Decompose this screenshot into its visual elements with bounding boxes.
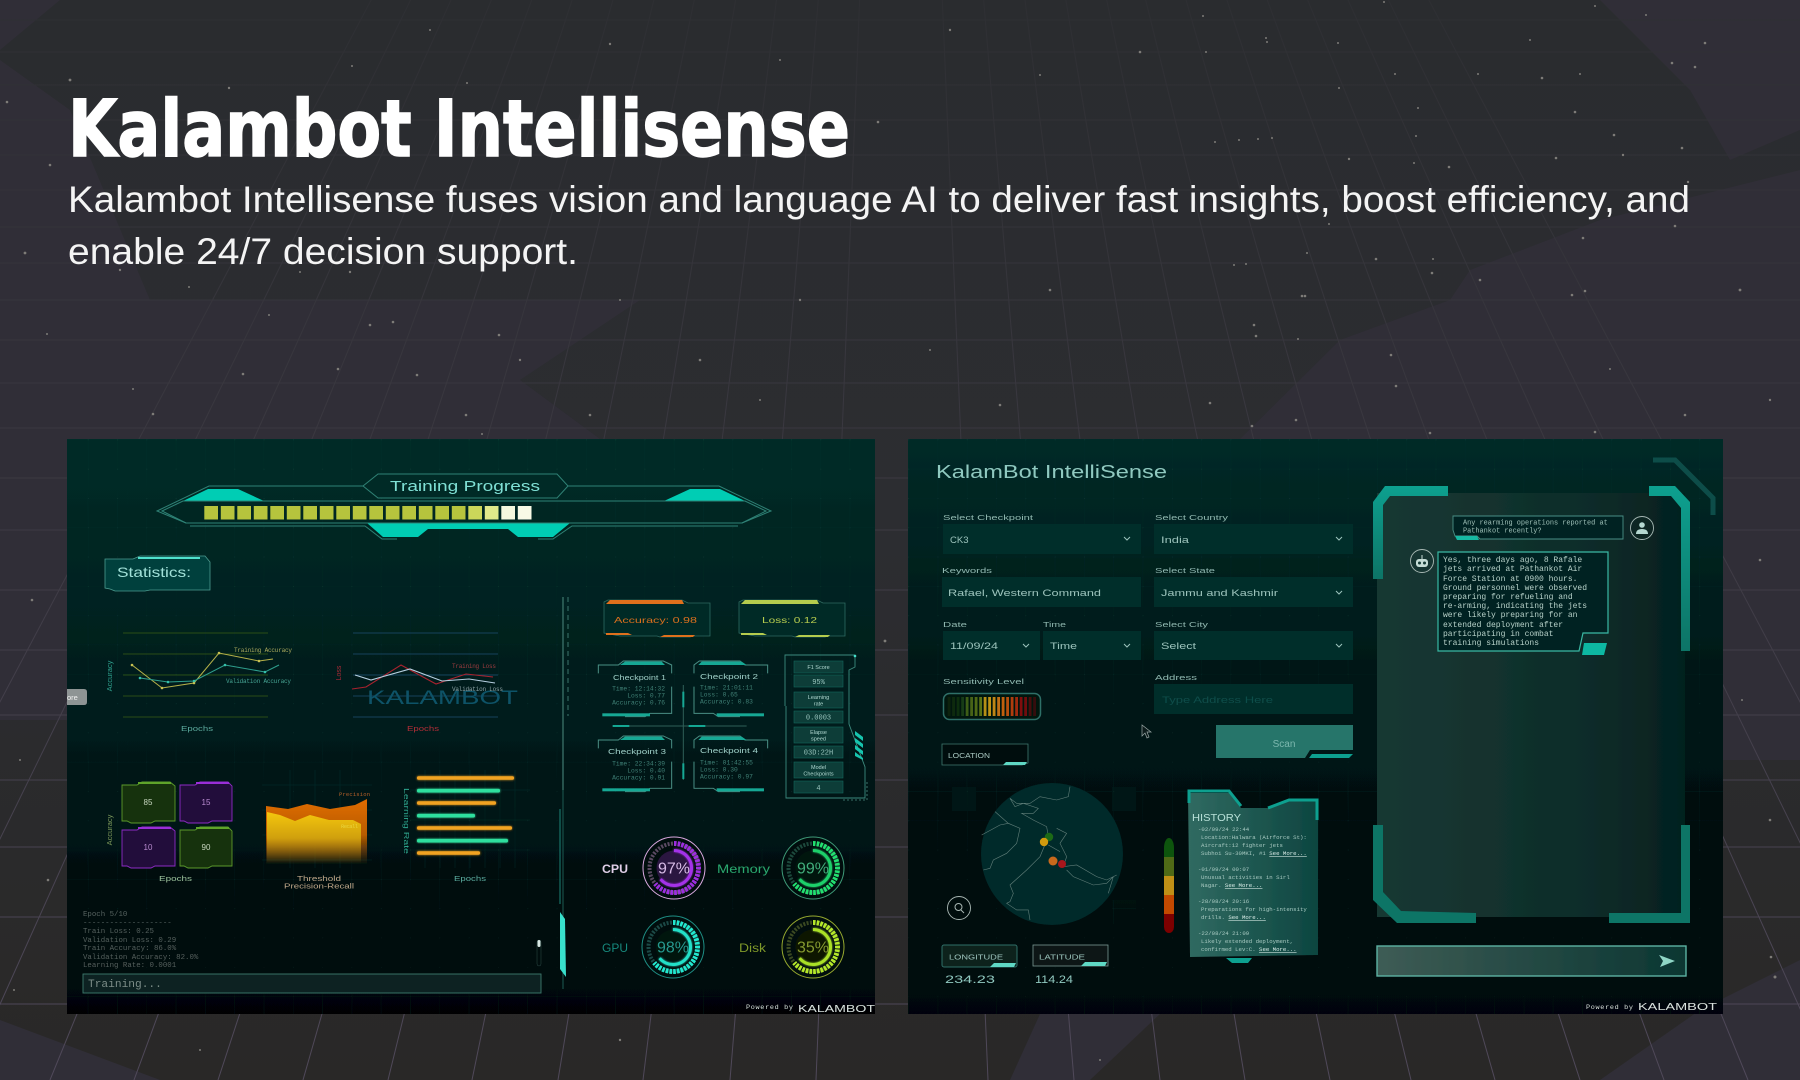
loss metric card xyxy=(739,600,845,637)
gauge: CPU xyxy=(602,837,705,899)
form fields xyxy=(942,513,1353,714)
training status bar: Training... xyxy=(88,979,162,991)
line chart: accuracy: Accuracy xyxy=(105,660,114,691)
metrics side panel: Learning xyxy=(808,695,829,701)
line chart: loss with watermark: Loss xyxy=(336,665,343,680)
terminal log xyxy=(83,911,199,970)
checkpoint cards: Checkpoint 3 xyxy=(608,747,666,756)
area chart: precision recall: Threshold xyxy=(297,876,341,883)
history panel: Subhoi Su-30MKI, #1 See More... xyxy=(1201,850,1307,857)
more tab xyxy=(67,689,87,705)
icon: user xyxy=(1630,516,1654,540)
checkpoint cards: Checkpoint 4 xyxy=(700,746,758,755)
checkpoint cards: Time: 01:42:55 xyxy=(700,760,753,766)
terminal log: Learning Rate: 0.0001 xyxy=(83,962,177,970)
line chart: loss with watermark: KALAMBOT xyxy=(367,688,519,709)
longitude latitude readouts xyxy=(942,945,1108,986)
line chart: loss with watermark xyxy=(336,633,519,733)
powered by logo: Powered by xyxy=(746,1004,793,1012)
history panel: Location:Halwara (Airforce St): xyxy=(1201,834,1307,841)
powered by logo: KALAMBOT xyxy=(798,1003,876,1015)
checkpoint cards: Time: 21:01:11 xyxy=(700,684,753,692)
bot chat response: preparing for refueling and xyxy=(1443,593,1573,602)
history panel: drills. See More... xyxy=(1201,914,1266,921)
terminal log: Train Loss: 0.25 xyxy=(83,928,154,936)
checkpoint cards: Loss: 0.65 xyxy=(700,692,738,698)
history panel: confirmed Lev:C. See More... xyxy=(1201,946,1297,953)
training status bar xyxy=(83,940,541,993)
line chart: accuracy: Training Accuracy xyxy=(234,647,292,654)
gauge: GPU: 98% xyxy=(657,940,689,956)
powered by logo: KALAMBOT xyxy=(1638,1001,1718,1013)
form fields: India xyxy=(1161,535,1190,546)
gauge: memory xyxy=(717,837,844,899)
area chart: precision recall: Precision-Recall xyxy=(284,884,355,890)
user chat message: Pathankot recently? xyxy=(1463,528,1542,536)
form fields: 11/09/24 xyxy=(950,641,998,652)
area chart: precision recall: Precision xyxy=(339,791,370,798)
subtitle: Kalambot Intellisense fuses vision and language AI to deliver fast insights, boost efficiency, and xyxy=(68,179,1690,220)
bot chat response xyxy=(1438,552,1608,655)
icon: robot xyxy=(1410,550,1434,572)
gauge: disk: 35% xyxy=(797,940,829,956)
bot chat response: Yes, three days ago, 8 Rafale xyxy=(1443,556,1582,565)
chat window frame xyxy=(1373,460,1713,923)
line chart: accuracy xyxy=(105,633,292,733)
checkpoint cards: Loss: 0.40 xyxy=(627,768,665,774)
checkpoint cards: Loss: 0.30 xyxy=(700,766,738,774)
confusion matrix: 90 xyxy=(202,843,211,852)
metrics side panel: Model xyxy=(811,765,826,771)
longitude latitude readouts: LONGITUDE xyxy=(949,952,1003,962)
metrics side panel: F1 Score xyxy=(807,665,830,671)
form fields: Select City xyxy=(1155,620,1208,629)
history panel xyxy=(1188,791,1318,963)
history panel: Likely extended deployment, xyxy=(1201,938,1293,945)
form fields: CK3 xyxy=(950,535,968,546)
form fields: Select Checkpoint xyxy=(943,513,1034,522)
form fields: Time xyxy=(1043,620,1066,629)
panel: training dashboard screenshot xyxy=(67,439,876,1015)
gauge: CPU: 97% xyxy=(658,860,690,878)
form fields: Jammu and Kashmir xyxy=(1161,588,1278,599)
terminal log: Train Accuracy: 86.0% xyxy=(83,945,177,953)
bar chart: learning rate: Epochs xyxy=(454,876,487,883)
gauge: disk xyxy=(739,916,844,978)
vertical divider xyxy=(560,597,568,989)
gauge: CPU: CPU xyxy=(602,864,628,876)
app title: KalamBot IntelliSense xyxy=(936,462,1167,482)
history panel: Aircraft:12 fighter jets xyxy=(1201,842,1283,849)
metrics side panel: 0.0003 xyxy=(806,714,831,722)
powered by logo xyxy=(1586,1001,1718,1013)
confusion matrix: Accuracy xyxy=(105,814,114,845)
icon: search xyxy=(948,896,970,920)
scan button: Scan xyxy=(1273,739,1295,750)
line chart: accuracy: Epochs xyxy=(181,726,214,733)
history panel: HISTORY xyxy=(1192,812,1241,824)
terminal log: Validation Accuracy: 82.0% xyxy=(83,954,199,962)
scan button xyxy=(1216,725,1353,758)
gauge: GPU: GPU xyxy=(602,943,628,955)
title: Kalambot Intellisense xyxy=(68,85,850,175)
loss metric card: Loss: 0.12 xyxy=(762,615,817,625)
form fields: Keywords xyxy=(942,566,992,575)
history panel: Nagar. See More... xyxy=(1201,882,1262,889)
terminal log: Validation Loss: 0.29 xyxy=(83,937,176,945)
history panel: -22/08/24 21:09 xyxy=(1198,930,1250,937)
line chart: loss with watermark: Training Loss xyxy=(452,663,496,670)
gauge: memory: Memory xyxy=(717,864,770,876)
checkpoint cards: Accuracy: 0.97 xyxy=(700,774,753,780)
terminal log: Epoch 5/10 xyxy=(83,911,127,919)
bot chat response: re-arming, indicating the jets xyxy=(1443,602,1587,611)
user chat message: Any rearming operations reported at xyxy=(1463,520,1608,528)
statistics label xyxy=(105,556,210,591)
checkpoint cards: Accuracy: 0.76 xyxy=(612,700,665,706)
panel: intellisense query screenshot xyxy=(908,439,1723,1014)
confusion matrix: Epochs xyxy=(159,876,193,883)
history panel: -02/09/24 22:44 xyxy=(1198,826,1250,833)
bot chat response: participating in combat xyxy=(1443,630,1553,639)
checkpoint cards: Loss: 0.77 xyxy=(627,692,665,700)
sensitivity meter xyxy=(944,694,1040,720)
location label xyxy=(942,744,1028,765)
metrics side panel: Checkpoints xyxy=(803,772,834,778)
form fields: Sensitivity Level xyxy=(943,677,1024,686)
bot chat response: Ground personnel were observed xyxy=(1443,584,1587,593)
checkpoint cards: Accuracy: 0.83 xyxy=(700,698,753,706)
powered by logo: Powered by xyxy=(1586,1004,1633,1012)
form fields: Select Country xyxy=(1155,513,1228,522)
subtitle xyxy=(68,179,1690,272)
metrics side panel: 95% xyxy=(812,679,826,687)
accuracy metric card: Accuracy: 0.98 xyxy=(614,615,697,625)
longitude latitude readouts: 114.24 xyxy=(1035,974,1073,986)
gauge: GPU xyxy=(602,916,704,978)
checkpoint cards xyxy=(598,661,768,792)
history panel: -28/08/24 20:16 xyxy=(1198,898,1250,905)
bot chat response: extended deployment after xyxy=(1443,621,1563,630)
training progress banner: Training Progress xyxy=(390,478,540,495)
form fields: Select xyxy=(1161,641,1196,652)
metrics side panel: 03D:22H xyxy=(804,750,833,758)
bot chat response: Force Station at 0900 hours. xyxy=(1443,575,1577,584)
history panel: Unusual activities in Sirl xyxy=(1201,874,1290,881)
progress bar segments xyxy=(204,506,532,520)
statistics label: Statistics: xyxy=(117,564,191,580)
bot chat response: were likely preparing for an xyxy=(1443,611,1578,620)
form fields: Address xyxy=(1155,673,1197,682)
metrics side panel: speed xyxy=(811,736,826,742)
accuracy metric card xyxy=(604,600,710,637)
line chart: loss with watermark: Epochs xyxy=(407,726,440,733)
metrics side panel xyxy=(785,655,867,800)
form fields: Select State xyxy=(1155,566,1215,575)
gauge: disk: Disk xyxy=(739,943,766,955)
confusion matrix: 85 xyxy=(144,798,153,807)
location label: LOCATION xyxy=(948,753,990,760)
form fields: Date xyxy=(943,620,967,629)
form fields: Type Address Here xyxy=(1162,695,1273,706)
metrics side panel: Elapse xyxy=(810,730,827,736)
cursor xyxy=(1142,725,1151,738)
bot chat response: training simulations xyxy=(1443,639,1539,648)
line chart: accuracy: Validation Accuracy xyxy=(226,678,291,685)
area chart: precision recall: Recall xyxy=(341,823,358,830)
checkpoint cards: Checkpoint 2 xyxy=(700,672,758,681)
chat input with send arrow xyxy=(1377,946,1686,976)
gauge: memory: 99% xyxy=(797,860,829,878)
longitude latitude readouts: 234.23 xyxy=(945,974,995,986)
confusion matrix: 15 xyxy=(202,798,211,807)
metrics side panel: rate xyxy=(814,702,823,708)
history panel: -01/09/24 00:07 xyxy=(1198,866,1249,873)
checkpoint cards: Accuracy: 0.91 xyxy=(612,774,665,782)
confusion matrix: 10 xyxy=(144,843,153,852)
area chart: precision recall xyxy=(262,770,372,890)
bar chart: learning rate: Learning Rate xyxy=(402,788,411,854)
powered by logo xyxy=(746,1003,876,1015)
subtitle: enable 24/7 decision support. xyxy=(68,231,578,272)
checkpoint cards: Time: 22:34:39 xyxy=(612,760,665,768)
metrics side panel: 4 xyxy=(816,785,821,793)
severity legend bar xyxy=(1164,838,1174,933)
form fields: Rafael, Western Command xyxy=(948,588,1101,599)
history panel: Preparations for high-intensity xyxy=(1201,906,1307,913)
training progress banner xyxy=(157,474,771,539)
map with hotspot markers xyxy=(952,783,1136,925)
more tab: ore xyxy=(67,693,78,702)
terminal log: -------------------- xyxy=(83,920,172,928)
line chart: loss with watermark: Validation Loss xyxy=(452,686,503,693)
confusion matrix xyxy=(105,782,232,883)
bot chat response: jets arrived at Pathankot Air xyxy=(1443,565,1582,574)
longitude latitude readouts: LATITUDE xyxy=(1039,952,1085,962)
form fields: Time xyxy=(1050,641,1077,652)
bar chart: learning rate xyxy=(402,770,530,883)
user chat message xyxy=(1453,516,1623,540)
checkpoint cards: Time: 12:14:32 xyxy=(612,686,665,692)
checkpoint cards: Checkpoint 1 xyxy=(613,673,666,682)
